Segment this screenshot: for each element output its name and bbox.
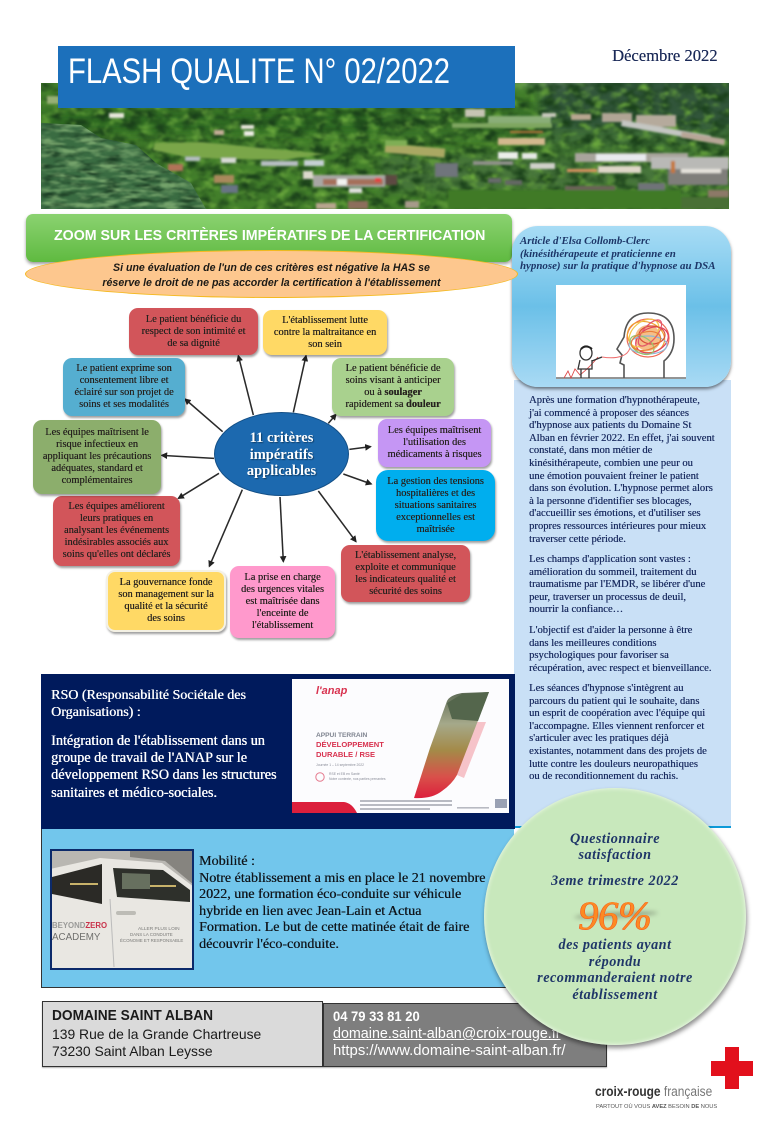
green banner: zoom heading (26, 214, 512, 262)
arrows connecting centre to criteria (161, 355, 372, 568)
article text: paragraph 1: kinésithérapeute, combien une peur ou (529, 458, 693, 469)
illustration: person untangling scribbled thoughts in a head (556, 285, 686, 379)
central ellipse: impératifs (250, 446, 313, 462)
mobility text (199, 853, 486, 952)
criterion: hospital tensions (376, 470, 495, 541)
criterion: infection risk: complémentaires (62, 475, 132, 486)
survey title: Questionnaire (570, 831, 660, 847)
orange ellipse callout: réserve le droit de ne pas accorder la certification à l'établissement (102, 277, 441, 289)
mobility text: 2022, une formation éco-conduite sur véhicule (199, 886, 461, 902)
article heading (520, 235, 716, 272)
phone: 04 79 33 81 20 (333, 1009, 420, 1024)
survey title: satisfaction (578, 847, 652, 863)
criterion: hospital tensions: La gestion des tensions (387, 476, 484, 486)
date: Décembre 2022 (612, 46, 718, 65)
ANAP document cover: DURABLE / RSE (316, 750, 375, 759)
criterion: hospital tensions: hospitalières et des (396, 488, 475, 498)
diagram: 11 critical criteria (32, 308, 498, 642)
logo wordmark: croix-rouge française (595, 1084, 712, 1099)
mobility text: découvrir l'éco-conduite. (199, 936, 339, 952)
article text: paragraph 1: à la personne d'identifier ses blocages, (529, 496, 692, 507)
article text: paragraph 3: L'objectif est d'aider la personne à être (529, 625, 692, 636)
ANAP document cover: DÉVELOPPEMENT (316, 740, 384, 749)
article heading: Article d'Elsa Collomb-Clerc (520, 235, 650, 247)
criterion: adverse events (53, 496, 180, 566)
criterion: governance: des soins (147, 613, 185, 624)
criterion: consent: éclairé sur son projet de (74, 387, 174, 398)
orange ellipse callout: Si une évaluation de l'un de ces critères est négative la HAS se (113, 262, 430, 274)
criterion: consent: Le patient exprime son (76, 363, 172, 374)
criterion: infection risk (33, 420, 161, 494)
article text: paragraph 2 (529, 554, 706, 615)
RSO text: développement RSO dans les structures (51, 767, 276, 783)
article text: paragraph 1: j'ai commencé à proposer des séances (529, 408, 689, 419)
footer: address block (42, 1001, 323, 1067)
criterion: governance: son management sur la (118, 589, 214, 600)
article text: paragraph 2: peur, traverser un processus de deuil, (529, 592, 686, 603)
ANAP document cover: Journée 1 – 14 septembre 2022 (316, 763, 364, 767)
RSO text: Intégration de l'établissement dans un (51, 733, 265, 749)
panel: Mobility (41, 829, 514, 988)
article text: paragraph 1: d'accueillir ses émotions, et d'utiliser ses (529, 508, 701, 519)
criterion: quality indicators: L'établissement analyse, (355, 550, 456, 560)
panel: RSO (41, 674, 515, 829)
shadow behind figure (574, 910, 658, 920)
criterion: consent: soins et ses modalités (79, 399, 169, 410)
ANAP document cover: Notre contexte, nos parties prenantes (329, 777, 386, 781)
criterion: vital emergencies: des urgences vitales (241, 584, 324, 595)
survey title (570, 831, 660, 863)
car photo: DANS LA CONDUITE (130, 932, 173, 937)
article text: paragraph 1 (528, 395, 715, 545)
criterion: pain: Le patient bénéficie de (346, 363, 440, 374)
article text: paragraph 1: propres ressources intérieures pour mieux (529, 521, 706, 532)
criterion: quality indicators (341, 545, 470, 602)
cedar tree (41, 123, 206, 209)
criterion: mistreatment: contre la maltraitance en (274, 326, 376, 338)
criterion: pain (332, 358, 454, 416)
article text: paragraph 3: dans les meilleures conditions (529, 638, 656, 649)
criterion: infection risk: appliquant les précautions (43, 451, 151, 462)
panel: hypnosis article header (512, 226, 731, 387)
central ellipse (214, 412, 349, 496)
organisation name: DOMAINE SAINT ALBAN (52, 1008, 213, 1024)
criterion: mistreatment: son sein (308, 338, 342, 350)
central ellipse: 11 critères (250, 430, 313, 446)
title: FLASH QUALITE N° 02/2022 (68, 52, 450, 91)
criterion: vital emergencies: l'enceinte de (257, 608, 308, 619)
survey result text: répondu (589, 954, 641, 970)
criterion: mistreatment: L'établissement lutte (282, 314, 368, 326)
criterion: governance: La gouvernance fonde (120, 577, 212, 588)
website: https://www.domaine-saint-alban.fr/ (333, 1043, 566, 1059)
criterion: adverse events: Les équipes améliorent (68, 501, 165, 512)
mobility text: Formation. Le but de cette matinée était de faire (199, 919, 469, 935)
criterion: privacy: de sa dignité (167, 338, 220, 348)
period: 3eme trimestre 2022 (551, 873, 679, 889)
article text: paragraph 3 (529, 625, 711, 674)
criterion: hospital tensions: maîtrisée (416, 524, 455, 534)
article text: paragraph 1: Alban en février 2022. En effet, j'ai souvent (529, 433, 715, 444)
criterion: quality indicators: les indicateurs qualité et (355, 574, 456, 584)
RSO heading: Organisations) : (51, 705, 141, 720)
criterion: vital emergencies: l'établissement (252, 620, 313, 631)
criterion: governance: qualité et la sécurité (124, 601, 208, 612)
ANAP document cover: l'anap (316, 685, 348, 697)
mobility text: Mobilité : (199, 853, 255, 869)
criterion: mistreatment (263, 310, 387, 355)
mobility text: hybride en lien avec Jean-Lain et Actua (199, 903, 421, 919)
satisfaction circle (484, 788, 746, 1045)
survey result text: des patients ayant (558, 937, 672, 953)
address (52, 1026, 261, 1059)
article text: paragraph 3: récupération, avec respect et bienveillance. (529, 663, 711, 674)
criterion: adverse events: leurs pratiques en (80, 513, 153, 524)
RSO text: groupe de travail de l'ANAP sur le (51, 750, 247, 766)
article text: paragraph 2: amélioration du sommeil, traitement du (529, 567, 696, 578)
central ellipse: applicables (247, 463, 316, 479)
address: 73230 Saint Alban Leysse (52, 1043, 213, 1059)
criterion: vital emergencies: est maîtrisée dans (246, 596, 319, 607)
article text: paragraph 1: d'hypnose aux patients du Domaine St (529, 420, 691, 431)
article text: paragraph 1: Après une formation d'hypnothérapeute, (529, 395, 700, 406)
car photo: ÉCONOME ET RESPONSABLE (120, 938, 183, 943)
RSO heading (51, 688, 246, 720)
survey result text: établissement (572, 987, 658, 1003)
criterion: pain: rapidement sa douleur (345, 399, 441, 410)
panel: hypnosis article body background (514, 380, 731, 828)
article text: paragraph 2: traumatisme par l'EMDR, se libérer d'une (529, 579, 705, 590)
criterion: quality indicators: sécurité des soins (369, 586, 442, 596)
orange ellipse callout (25, 250, 518, 298)
article heading: hypnose) sur la pratique d'hypnose au DSA (520, 260, 715, 272)
criterion: infection risk: risque infectieux en (56, 439, 138, 450)
car photo: ACADEMY (52, 932, 101, 943)
footer: contact block (323, 1003, 607, 1067)
article text: paragraph 4: ou de reconditionnement du rachis. (529, 771, 678, 782)
criterion: consent (63, 358, 185, 416)
article text: paragraph 4 (529, 683, 707, 782)
article text: paragraph 4: s'articuler avec les pratiques déjà (529, 733, 669, 744)
criterion: risky medicines: Les équipes maîtrisent (388, 425, 481, 436)
banner heading: ZOOM SUR LES CRITÈRES IMPÉRATIFS DE LA CERTIFICATION (54, 227, 485, 244)
ANAP document cover: RSE et EB en Santé (329, 772, 360, 776)
criterion: infection risk: Les équipes maîtrisent le (45, 427, 149, 438)
article text: paragraph 4: Les séances d'hypnose s'intègrent au (529, 683, 683, 694)
title banner (58, 46, 515, 108)
article text: paragraph 4: lutte contre les douleurs neuropathiques (529, 759, 698, 770)
car photo (50, 849, 194, 970)
survey result text: recommanderaient notre (537, 970, 693, 986)
criterion: privacy: respect de son intimité et (142, 326, 245, 336)
criterion: adverse events: soins qu'elles ont déclarés (63, 549, 170, 560)
criterion: adverse events: analysant les événements (64, 525, 169, 536)
article text: paragraph 4: l'accompagne. Elles viennent renforcer et (529, 721, 704, 732)
ANAP document cover: APPUI TERRAIN (316, 732, 368, 739)
RSO text: sanitaires et médico-sociales. (51, 785, 217, 801)
article text: paragraph 1: une émotion pouvaient freiner le patient (529, 471, 699, 482)
email: domaine.saint-alban@croix-rouge.fr (333, 1026, 560, 1042)
header photo: landscape of valley and town (41, 83, 729, 209)
icon: red cross (711, 1047, 753, 1089)
article text: paragraph 2: nourrir la confiance… (529, 604, 623, 615)
survey result text (537, 937, 693, 1003)
criterion: hospital tensions: situations sanitaires (395, 500, 476, 510)
article text: paragraph 4: existantes, notamment dans des projets de (529, 746, 707, 757)
criterion: infection risk: adéquates, standard et (51, 463, 143, 474)
criterion: vital emergencies (230, 566, 335, 638)
criterion: risky medicines: l'utilisation des (403, 437, 466, 448)
96 percent figure: 96% (578, 893, 652, 938)
criterion: pain: ou à soulager (364, 387, 422, 398)
criterion: vital emergencies: La prise en charge (244, 572, 321, 583)
article heading: (kinésithérapeute et praticienne en (520, 248, 676, 260)
criterion: adverse events: indésirables associés aux (65, 537, 168, 548)
article text: paragraph 1: constaté, dans mon métier de (529, 445, 652, 456)
article text: paragraph 4: parcours du patient qui le souhaite, dans (529, 696, 699, 707)
criterion: privacy (129, 308, 258, 355)
criterion: risky medicines (378, 419, 491, 467)
criterion: risky medicines: médicaments à risques (387, 449, 482, 460)
article text: paragraph 1: dans son évolution. L'hypnose permet alors (529, 483, 713, 494)
RSO text (51, 733, 276, 801)
criterion: privacy: Le patient bénéficie du (146, 314, 241, 324)
criterion: pain: soins visant à anticiper (346, 375, 440, 386)
article text: paragraph 1: traverser cette période. (529, 534, 626, 545)
article text: paragraph 3: psychologiques pour favoriser sa (529, 650, 669, 661)
logo tagline: PARTOUT OÙ VOUS AVEZ BESOIN DE NOUS (596, 1104, 717, 1110)
logo: Croix-Rouge française (595, 1047, 753, 1110)
criterion: consent: consentement libre et (80, 375, 168, 386)
article text: paragraph 4: un esprit de coopération avec l'équipe qui (529, 708, 705, 719)
article text: paragraph 2: Les champs d'application sont vastes : (529, 554, 691, 565)
criterion: governance (106, 570, 226, 632)
RSO heading: RSO (Responsabilité Sociétale des (51, 688, 246, 703)
mobility text: Notre établissement a mis en place le 21 novembre (199, 870, 485, 886)
car photo: ALLER PLUS LOIN (138, 926, 180, 932)
criterion: quality indicators: exploite et communique (355, 562, 456, 572)
ANAP document cover (292, 679, 509, 813)
car photo: BEYONDZERO (52, 921, 107, 930)
criterion: hospital tensions: exceptionnelles est (396, 512, 475, 522)
address: 139 Rue de la Grande Chartreuse (52, 1026, 261, 1042)
